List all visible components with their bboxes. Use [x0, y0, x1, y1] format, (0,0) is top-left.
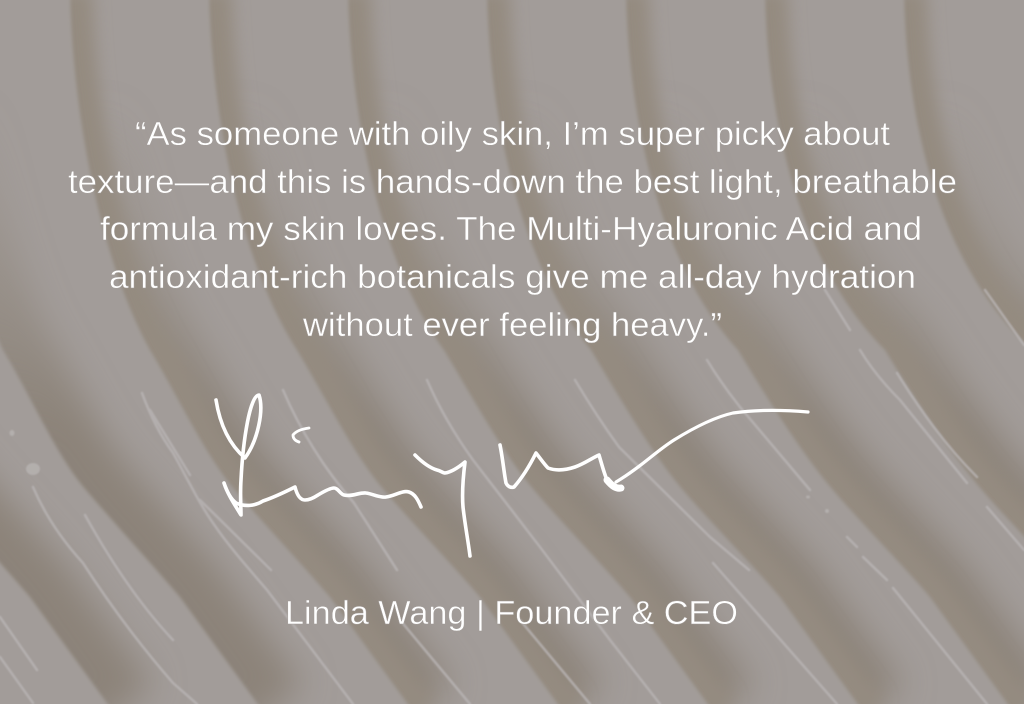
quote line 2: texture—and this is hands-down the best light, breathable [68, 163, 957, 200]
quote line 5: without ever feeling heavy.” [302, 306, 722, 343]
signature [216, 395, 808, 556]
attribution: name and title: Linda Wang | Founder & CEO [285, 594, 738, 631]
quote line 1: “As someone with oily skin, I’m super picky about [135, 115, 890, 152]
quote text [68, 115, 957, 343]
quote line 4: antioxidant-rich botanicals give me all-day hydration [109, 258, 916, 295]
quote line 3: formula my skin loves. The Multi-Hyaluronic Acid and [100, 210, 922, 247]
